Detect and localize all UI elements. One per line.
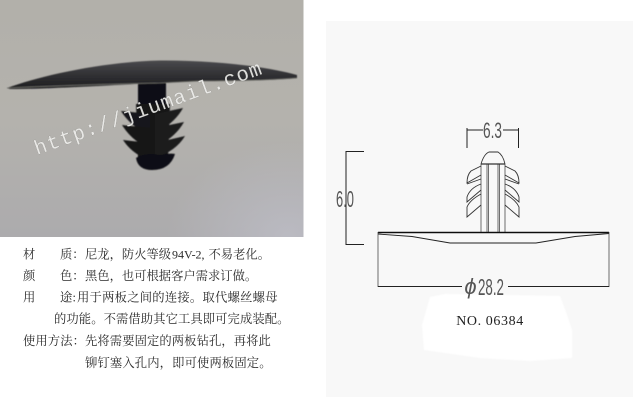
text: usage line one: 用于两板之间的连接。取代螺丝螺母 [77,290,278,304]
panel: product photo [0,0,304,237]
text: material: 尼龙，防火等级 [85,246,171,262]
panel: specification text [23,246,290,370]
text: usage line one: 用 [23,290,36,304]
rivet profile drawing [378,152,609,287]
dimension: height 6.0: 6.0 [336,186,354,212]
dimension: diameter 28.2: 28.2 [478,274,504,300]
text: material: 材 [23,246,35,262]
text: color: 黑色，也可根据客户需求订做。 [85,268,257,283]
dimension: diameter 28.2 [378,274,609,300]
text: color: 色： [60,269,85,283]
dimension: width 6.3 [467,118,518,148]
dimension: width 6.3: 6.3 [483,118,502,143]
text: method line two: 铆钉塞入孔内，即可使两板固定。 [85,355,272,370]
text: usage line two: 的功能。不需借助其它工具即可完成装配。 [54,311,290,326]
dimension: diameter 28.2: ϕ [464,274,477,299]
watermark: site url: http://jiumail.com [32,58,266,162]
text: method line one: 使用方法： [23,333,85,348]
dimension: height 6.0 [336,152,364,244]
text: material: 质： [60,246,85,262]
text: color: 颜 [23,268,36,283]
text: material: 不易老化。 [208,246,270,262]
text: method line one: 先将需要固定的两板钻孔，再将此 [85,333,271,348]
part number: NO. 06384 [456,314,524,329]
text: material: 94V-2, [172,248,205,262]
panel: technical drawing [326,21,633,397]
text: usage line one: 途: [60,290,76,304]
photo: plastic rivet [7,60,297,170]
